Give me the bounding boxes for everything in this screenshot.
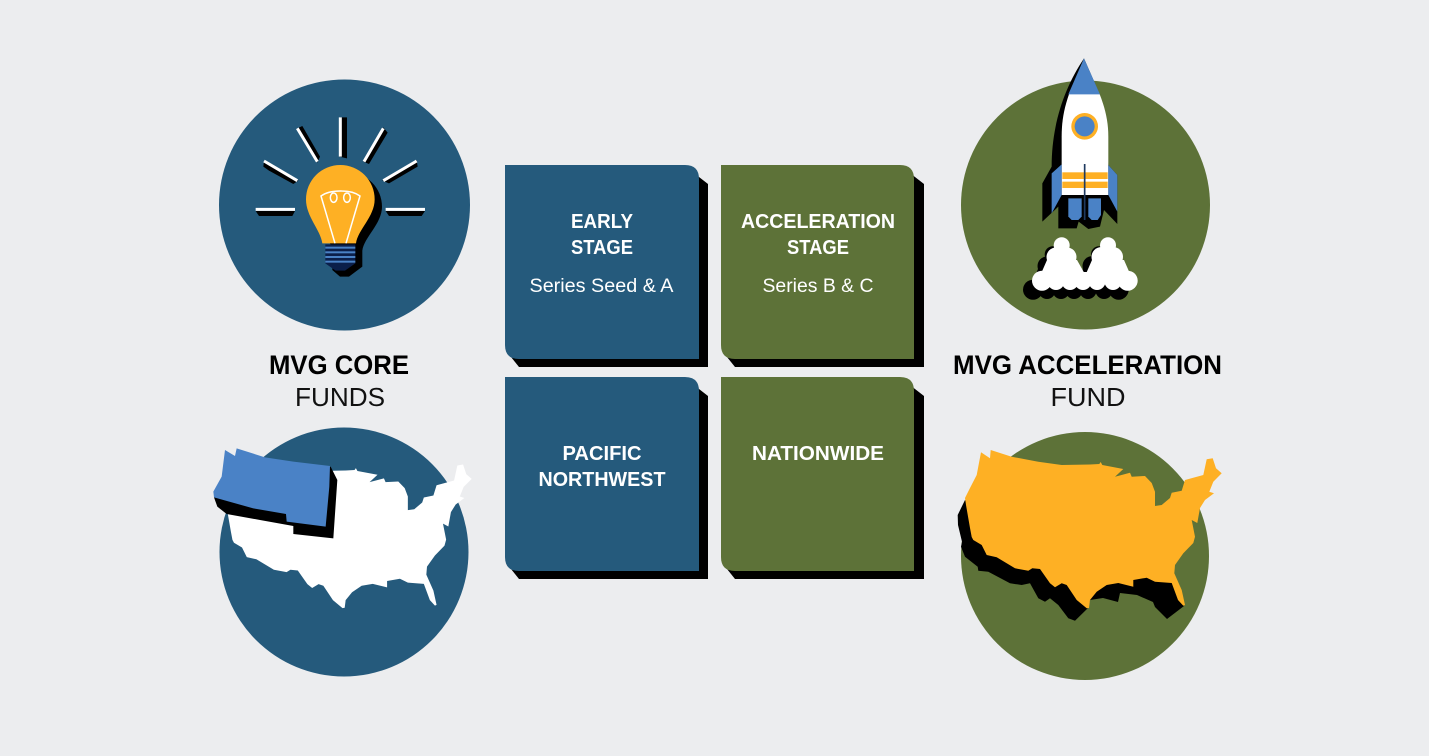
icon: smoke clouds (1023, 237, 1138, 300)
panel: early stage (505, 165, 708, 367)
panel: acceleration stage (721, 165, 924, 367)
heading: MVG Acceleration Fund (953, 350, 1222, 412)
heading: MVG Acceleration Fund: MVG ACCELERATION (953, 350, 1222, 380)
panel: acceleration stage: ACCELERATION (741, 211, 895, 233)
panel: lightbulb circle (219, 80, 470, 330)
icon: rocket (1042, 58, 1117, 229)
panel: pacific northwest: NORTHWEST (538, 469, 666, 491)
map: Pacific Northwest highlight (213, 448, 337, 538)
heading: MVG Core Funds (269, 350, 409, 412)
panel: early stage: Series Seed & A (530, 276, 674, 297)
panel: early stage: EARLY (571, 211, 634, 233)
panel: core map circle (213, 428, 472, 676)
map: white USA (226, 457, 472, 608)
panel: early stage: STAGE (571, 237, 633, 259)
panel: pacific northwest (505, 377, 708, 579)
panel: nationwide: NATIONWIDE (752, 443, 884, 465)
heading: MVG Acceleration Fund: FUND (1050, 382, 1126, 412)
icon: lightbulb (256, 117, 425, 277)
panel: acceleration stage: STAGE (787, 237, 849, 259)
panel: acceleration stage: Series B & C (762, 276, 874, 297)
heading: MVG Core Funds: FUNDS (295, 382, 385, 412)
heading: MVG Core Funds: MVG CORE (269, 350, 409, 380)
map: orange USA with shadow (958, 450, 1222, 621)
panel: rocket circle (961, 58, 1210, 330)
panel: nationwide (721, 377, 924, 579)
panel: pacific northwest: PACIFIC (562, 443, 642, 465)
panel: acceleration map circle (958, 432, 1222, 680)
